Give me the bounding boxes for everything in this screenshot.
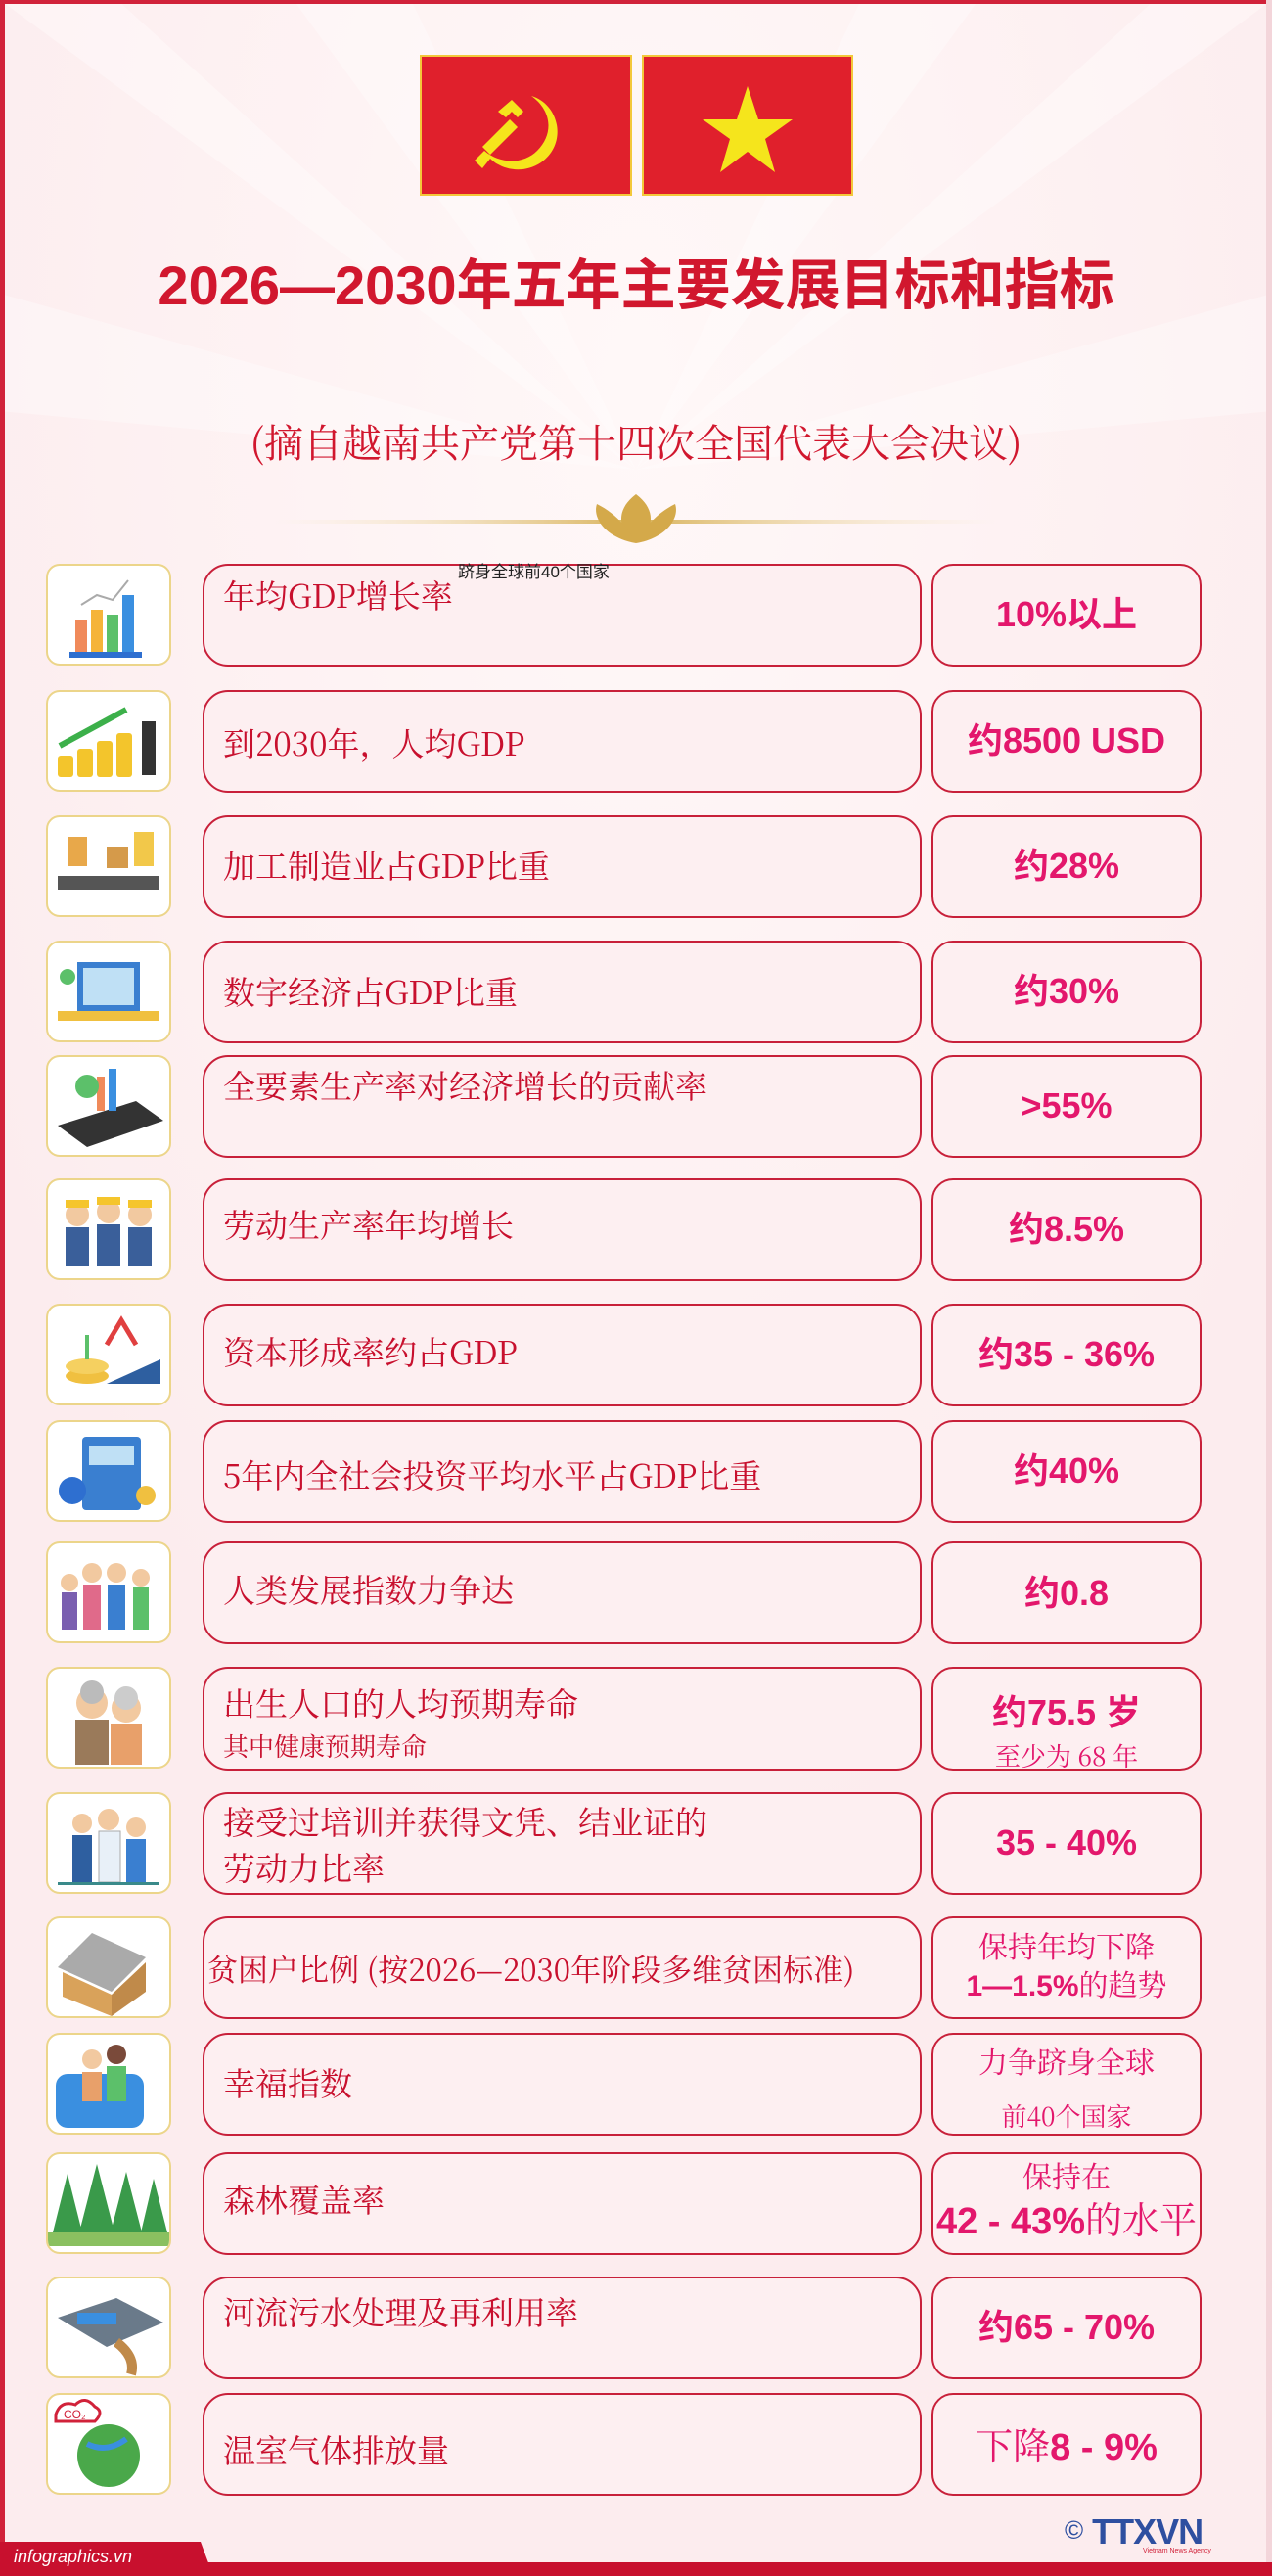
row 6 value: 约8.5% [1009,1209,1124,1249]
row 15 label: 河流污水处理及再利用率 [223,2288,578,2334]
ornament: gold lotus divider [320,494,953,543]
row 2 label: 到2030年，人均GDP [223,719,524,765]
row 12 value: 保持年均下降 [978,1923,1155,1966]
row 14 label: 森林覆盖率 [223,2176,385,2222]
row 10 label: 出生人口的人均预期寿命 [223,1679,578,1725]
footer band [0,2562,1272,2576]
row 8 value: 约40% [1014,1450,1119,1491]
footer tab: infographics.vn [0,2542,208,2566]
row 7 value: 约35 - 36% [978,1334,1155,1374]
row 14 value line 2: 42 - 43%的水平 [936,2190,1197,2244]
row 2 [46,690,171,792]
row 16 label: 温室气体排放量 [223,2426,449,2472]
row 1: GDP growth [46,564,171,666]
row 1 label: 年均GDP增长率 [223,572,453,618]
row 5 value: >55% [1021,1085,1113,1126]
row 4 value: 约30% [1014,971,1119,1011]
row 7 label: 资本形成率约占GDP [223,1328,518,1374]
row 11 value: 35 - 40% [996,1822,1137,1863]
row 8 [46,1420,171,1522]
row 3 value: 约28% [1014,846,1119,886]
row 10 sublabel: 其中健康预期寿命 [223,1727,427,1764]
row 11 label: 接受过培训并获得文凭、结业证的 [223,1798,707,1844]
row 2 value: 约8500 USD [968,720,1165,760]
row 10 [46,1667,171,1769]
row 12 label: 贫困户比例 (按2026—2030年阶段多维贫困标准) [207,1946,854,1990]
row 9 [46,1541,171,1643]
logo: TTXVN: © TTXVN [1065,2511,1203,2552]
row 6 label: 劳动生产率年均增长 [223,1201,514,1247]
flag: vietnam [642,55,853,196]
row 12 [46,1916,171,2018]
icon: bar chart [46,564,171,666]
row 15 [46,2277,171,2378]
row 10 value: 约75.5 岁 [992,1692,1141,1732]
row 5 [46,1055,171,1157]
title: 2026—2030年五年主要发展目标和指标 [158,254,1114,316]
subtitle: (摘自越南共产党第十四次全国代表大会决议) [250,413,1022,469]
row 13 value: 力争跻身全球 [978,2039,1155,2082]
row 3 [46,815,171,917]
row 15 value: 约65 - 70% [978,2307,1155,2347]
row 4 label: 数字经济占GDP比重 [223,968,518,1014]
row 13 [46,2033,171,2135]
row 8 label: 5年内全社会投资平均水平占GDP比重 [223,1451,761,1497]
row 12 value line 2: 1—1.5%的趋势 [966,1961,1167,2004]
row 6 [46,1178,171,1280]
row 16 [46,2393,171,2495]
flag: party [420,55,632,196]
stray note: 跻身全球前40个国家 [458,563,610,581]
row 14 [46,2152,171,2254]
logo: TTXVN: Vietnam News Agency [1143,2548,1211,2554]
row 5 label: 全要素生产率对经济增长的贡献率 [223,1062,707,1108]
row 3 label: 加工制造业占GDP比重 [223,842,550,888]
row 9 value: 约0.8 [1024,1573,1109,1613]
row 16 value: 下降8 - 9% [976,2416,1158,2470]
row 10 subvalue: 至少为 68 年 [995,1737,1138,1773]
row 14 value: 保持在 [1022,2153,1111,2196]
row 13 label: 幸福指数 [223,2059,352,2105]
row 9 label: 人类发展指数力争达 [223,1566,514,1612]
row 16: CO₂ [64,2408,86,2421]
row 7 [46,1304,171,1405]
row 1 value: 10%以上 [996,594,1137,634]
row 11 label line 2: 劳动力比率 [223,1844,385,1890]
row 11 [46,1792,171,1894]
row 13 value line 2: 前40个国家 [1002,2097,1131,2134]
footer tab: infographics.vn: infographics.vn [14,2547,132,2566]
row 4 [46,941,171,1042]
